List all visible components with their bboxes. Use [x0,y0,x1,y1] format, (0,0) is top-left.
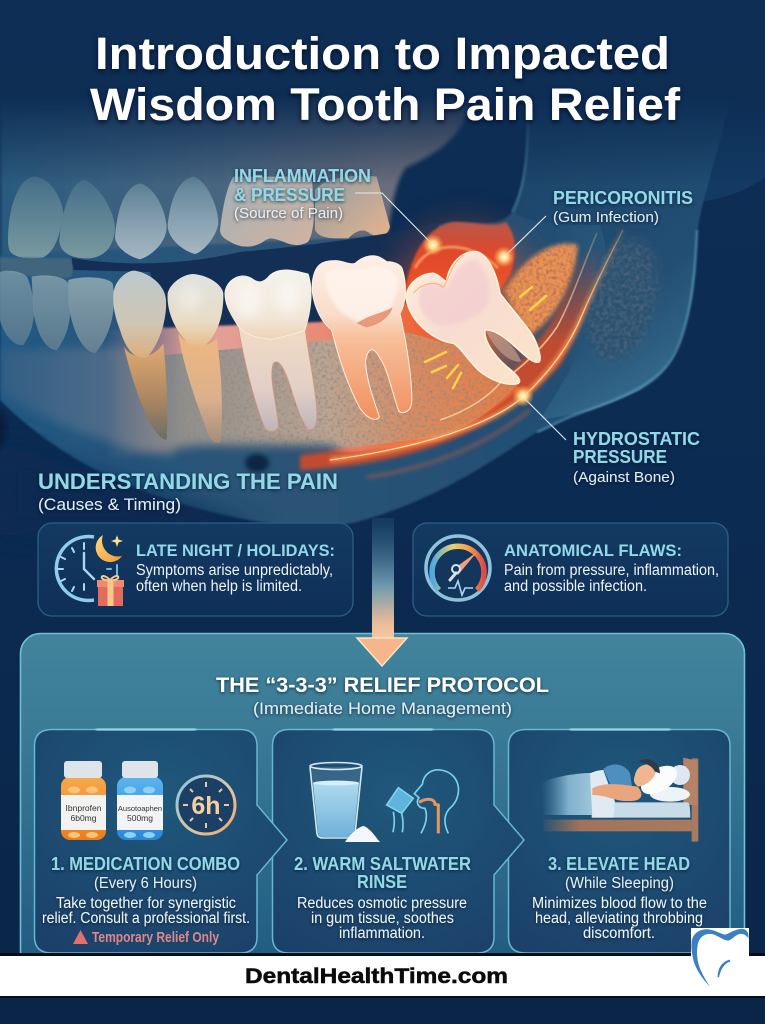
late night text: LATE NIGHT / HOLIDAYS: [136,541,335,560]
callout: inflammation and pressure: (Source of Pain) [234,205,343,222]
heading: understanding the pain: UNDERSTANDING THE PAIN [38,469,338,494]
premolar root B [178,333,222,443]
icon: orange pill bottle: Ibnprofen [66,803,102,813]
first molar [238,327,317,431]
protocol heading [216,674,549,718]
late night text: often when help is limited. [136,578,302,595]
icon: clock, moon and gift [56,535,124,606]
dark mandibular hole [245,454,269,472]
late night text: Symptoms arise unpredictably, [136,562,333,579]
icon: six hour clock: 6h [191,792,221,820]
ramus rim light [537,230,697,432]
faded and lower teeth [0,257,317,443]
panel: 3-3-3 relief protocol [20,518,744,974]
protocol heading: (Immediate Home Management) [253,699,512,718]
callout: hydrostatic pressure: (Against Bone) [573,469,675,486]
icon: blue pill bottle [117,761,163,840]
impacted wisdom tooth [406,252,540,384]
bottom strip [0,998,765,1024]
background shoulder curve [703,139,765,202]
title: Introduction to Impacted [95,28,670,79]
step 3 text: head, alleviating throbbing [535,910,703,927]
heading: understanding the pain [38,469,338,514]
nerve flames [425,287,546,388]
dark left jaw opening [0,412,6,448]
step 1 text: 1. MEDICATION COMBO [51,854,240,874]
callout dots [422,234,534,407]
website name: DentalHealthTime.com [245,965,508,988]
protocol heading: THE “3-3-3” RELIEF PROTOCOL [216,674,549,697]
callout: pericoronitis: PERICORONITIS [553,188,693,208]
callout: hydrostatic pressure: PRESSURE [573,447,667,467]
step 2 text: 2. WARM SALTWATER [294,854,471,874]
icon: orange pill bottle: 6b0mg [70,813,97,823]
callout lines [355,193,566,440]
anatomical flaws text: and possible infection. [504,578,647,595]
premolar root A [124,343,167,440]
step card 1: medication combo [34,728,287,953]
orange bone behind wisdom tooth [503,240,581,336]
anatomical flaws text: Pain from pressure, inflammation, [504,562,719,579]
icon: orange pill bottle [61,761,106,840]
step card 2: warm saltwater rinse [272,728,524,953]
callout: hydrostatic pressure: HYDROSTATIC [573,429,700,449]
callout: inflammation and pressure: & PRESSURE [234,185,345,205]
logo: tooth [691,928,749,987]
callout: inflammation and pressure [234,166,371,222]
second molar [312,256,412,419]
step 2 text: inflammation. [339,925,425,942]
upper jaw silhouette [0,103,467,257]
icon: six hour clock [177,776,235,834]
red canal band [300,232,600,470]
icon: sleeping person in bed [542,758,698,842]
callout: inflammation and pressure: INFLAMMATION [234,166,371,186]
inflamed gum over wisdom tooth [404,222,515,305]
late night text [136,541,335,595]
step 1 text [42,854,250,927]
illustration: impacted wisdom tooth in jaw [0,90,765,535]
icon: pressure gauge [426,536,490,600]
callout: pericoronitis: (Gum Infection) [553,209,659,226]
step 1 text: (Every 6 Hours) [94,875,197,892]
lower gum under faded teeth [0,345,175,455]
anatomical flaws text [504,541,719,595]
hot glow [370,210,560,420]
title [90,28,681,130]
panel: late night and holidays [38,523,353,616]
anatomical flaws text: ANATOMICAL FLAWS: [504,541,682,560]
title: Wisdom Tooth Pain Relief [90,79,681,130]
step 2 text [294,854,471,942]
grey jawbone texture [584,236,660,361]
heading: understanding the pain: (Causes & Timing) [38,495,181,514]
step 3 text: (While Sleeping) [565,875,674,892]
step 3 text: Minimizes blood flow to the [532,895,707,912]
icon: person rinsing [387,770,458,833]
arrow down [357,518,407,666]
ramus shading [516,124,720,420]
callout: hydrostatic pressure [573,429,700,486]
jaw silhouettes [0,90,765,526]
step 3 text [532,854,707,942]
mouth gap [72,222,440,330]
step 1 text: Take together for synergistic [56,895,236,912]
step card 3: elevate head [508,728,730,953]
icon: blue pill bottle: 500mg [127,813,153,823]
lower-left jaw fade [0,440,270,535]
icon: blue pill bottle: Ausotoaphen [118,804,162,813]
upper teeth [8,176,390,259]
callout: pericoronitis [553,188,693,226]
step 3 text: discomfort. [583,925,655,942]
icon: glass of saltwater [310,762,380,842]
step 2 text: Reduces osmotic pressure [297,895,467,912]
gum and bone [105,300,530,462]
lower jaw silhouette [0,142,719,524]
panel: anatomical flaws [413,523,728,616]
nerve canal lines [330,230,623,460]
footer band [0,953,765,998]
step 2 text: in gum tissue, soothes [311,910,454,927]
step 2 text: RINSE [357,872,407,892]
warning: Temporary Relief Only [92,929,220,946]
step 1 text: relief. Consult a professional first. [42,910,250,927]
step 3 text: 3. ELEVATE HEAD [548,854,690,874]
